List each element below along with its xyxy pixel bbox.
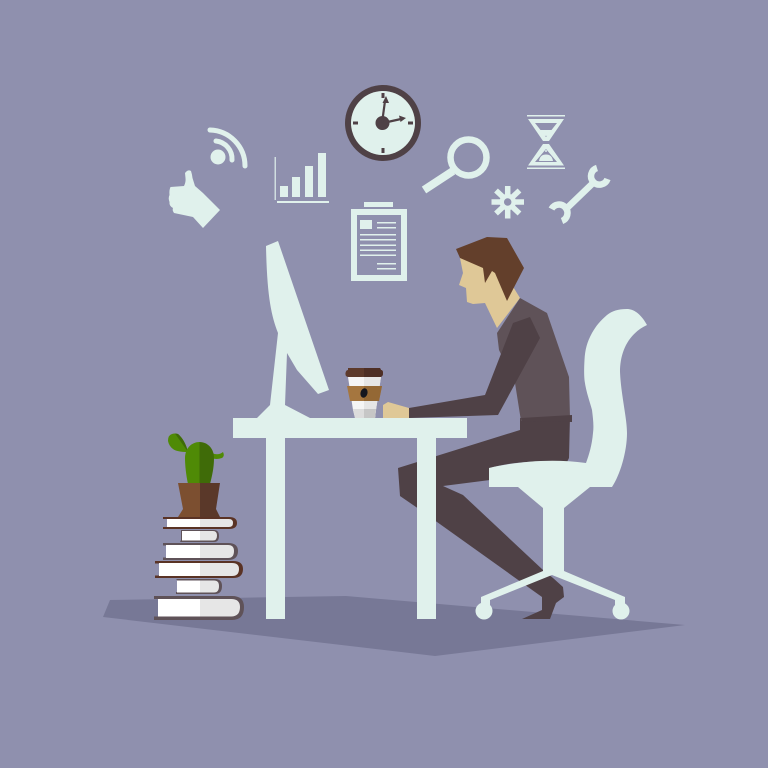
icon: clipboard report [354, 202, 404, 278]
person [383, 237, 572, 619]
neck and face [459, 250, 520, 328]
icon: clock [345, 85, 421, 161]
potted cactus [168, 434, 224, 517]
icon: wifi signal [210, 130, 245, 166]
icon: magnifying glass [424, 140, 486, 190]
icon: wrench [552, 168, 608, 221]
belt [521, 415, 572, 422]
floor shadow [103, 596, 685, 656]
office chair [476, 309, 647, 620]
legs [398, 416, 570, 619]
desk [233, 418, 467, 619]
monitor [257, 241, 329, 418]
arm [409, 317, 540, 418]
icon: bar chart [274, 153, 329, 203]
hand [383, 402, 409, 418]
icon: hourglass [527, 115, 565, 169]
icon: thumbs up [169, 170, 220, 228]
shirt torso [497, 298, 570, 421]
hair [456, 237, 524, 301]
icon: gear [492, 186, 524, 218]
stack of books [154, 517, 244, 620]
coffee cup [345, 368, 383, 418]
